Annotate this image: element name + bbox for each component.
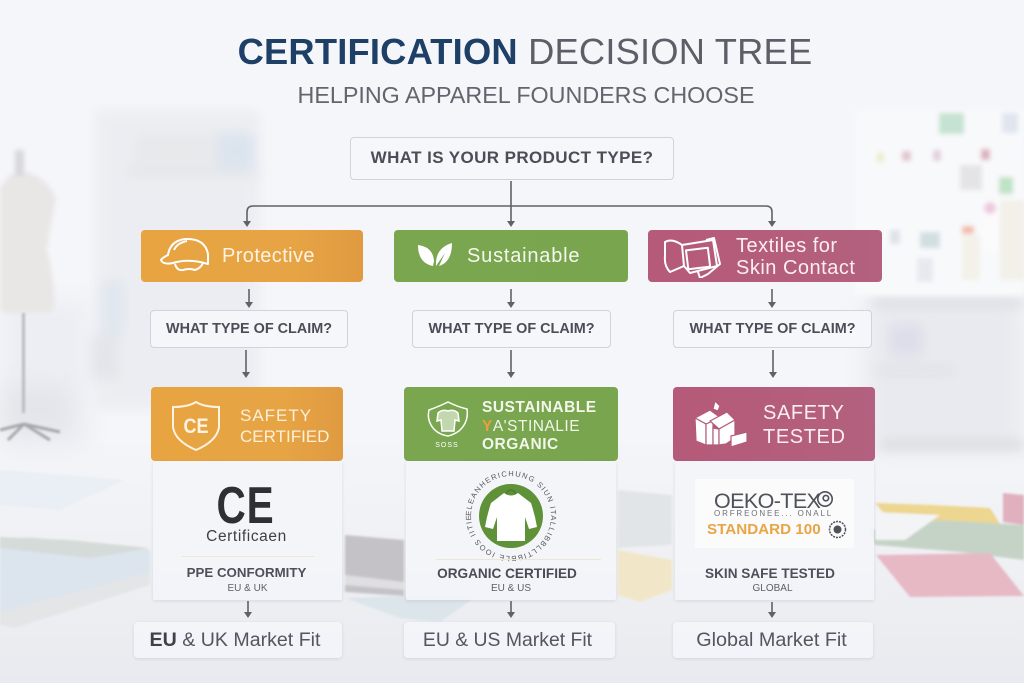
panel: textiles type [648, 230, 882, 282]
icon: shirt shield: SOSS [435, 442, 459, 449]
logo caption: Certificaen [206, 528, 287, 545]
logo: CE mark: CE [217, 477, 274, 535]
panel: OEKO-TEX card [675, 461, 874, 600]
label: safety certified [240, 406, 329, 446]
market fit: EU & UK: EU & UK Market Fit [150, 629, 320, 651]
label: EU & UK: EU & UK [227, 583, 268, 594]
market fit: EU & US: EU & US Market Fit [423, 629, 592, 651]
label: safety tested: SAFETY [763, 402, 844, 424]
label: sustainable organic: SUSTAINABLE [482, 399, 597, 416]
panel: safety certified [151, 387, 343, 461]
mannequin stand [0, 313, 60, 440]
panel: organic card [406, 461, 616, 600]
label: global: GLOBAL [752, 583, 793, 594]
icon: CE shield: CE [184, 415, 208, 438]
label: textiles for skin contact [736, 235, 855, 279]
panel: protective type [141, 230, 363, 282]
subtitle: HELPING APPAREL FOUNDERS CHOOSE [298, 82, 754, 108]
icon: shirt shield [428, 401, 468, 449]
panel: sustainable type [394, 230, 628, 282]
label: safety certified: SAFETY [240, 406, 312, 425]
title: CERTIFICATION DECISION TREE [238, 31, 812, 72]
label: textiles for skin contact: Skin Contact [736, 257, 855, 279]
label: safety tested: TESTED [763, 426, 846, 448]
label: organic certified: ORGANIC CERTIFIED [437, 566, 577, 581]
market fit: EU & UK [134, 622, 342, 658]
pin board [855, 110, 1024, 295]
icon: CE shield [172, 400, 220, 452]
question: claim left: WHAT TYPE OF CLAIM? [166, 321, 332, 337]
label: sustainable organic: ORGANIC [482, 436, 559, 453]
label: sustainable organic [482, 399, 597, 453]
label: textiles for skin contact: Textiles for [736, 235, 838, 257]
label: safety tested [763, 402, 846, 448]
logo text: small line: ORFREONEE... ONALL [714, 509, 833, 518]
panel: sustainable organic [404, 387, 618, 461]
logo: OEKO-TEX Standard 100 [695, 479, 854, 548]
icon: stacked boxes [696, 402, 746, 446]
label: sustainable organic: YA'STINALIE [482, 418, 580, 434]
label: safety certified: CERTIFIED [240, 427, 329, 446]
label: PPE conformity: PPE CONFORMITY [187, 565, 306, 580]
question: product type: WHAT IS YOUR PRODUCT TYPE? [371, 148, 653, 167]
panel: safety tested [673, 387, 875, 461]
market fit: EU & US [404, 622, 615, 658]
logo text: OEKO-TEX: OEKO-TEX [714, 489, 820, 513]
label: sustainable: Sustainable [467, 245, 580, 267]
mannequin [0, 150, 56, 313]
label: skin safe tested: SKIN SAFE TESTED [705, 566, 835, 581]
market fit: global [673, 622, 873, 658]
question: claim right: WHAT TYPE OF CLAIM? [689, 321, 856, 337]
icon: hard hat [160, 238, 209, 272]
desk fabrics [0, 470, 1024, 628]
question: claim left [150, 310, 348, 348]
label: EU & US: EU & US [491, 583, 531, 594]
question: claim middle [412, 310, 611, 348]
question: claim middle: WHAT TYPE OF CLAIM? [428, 321, 594, 337]
panel: CE card [153, 461, 342, 600]
market fit: global: Global Market Fit [696, 629, 847, 651]
icon: folded textiles [664, 237, 721, 278]
question: product type [350, 137, 674, 180]
icon: leaves [418, 243, 452, 266]
question: claim right [673, 310, 872, 348]
logo text: standard 100: STANDARD 100 [707, 521, 821, 538]
label: protective: Protective [222, 245, 315, 267]
